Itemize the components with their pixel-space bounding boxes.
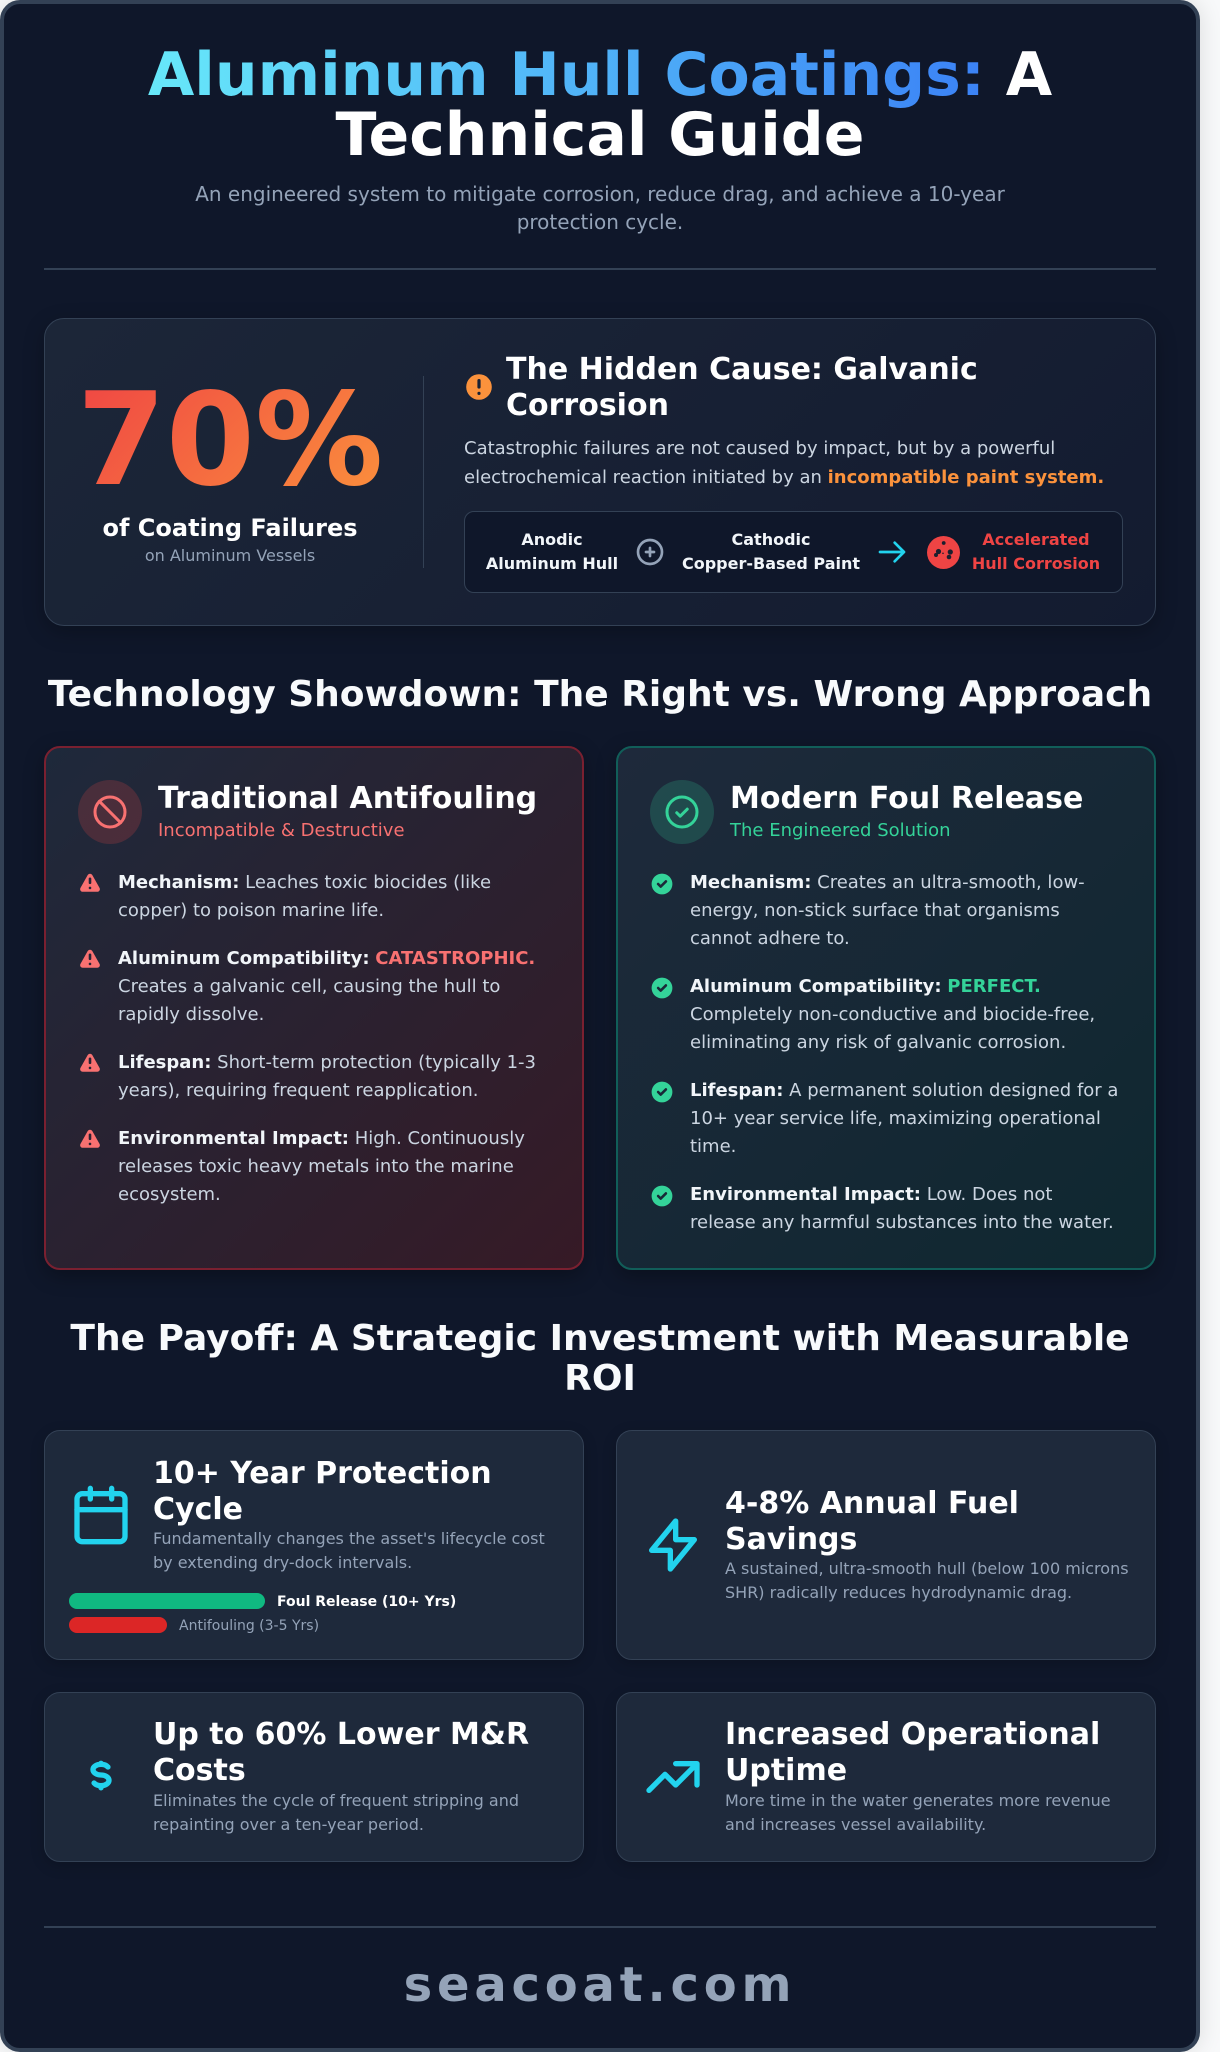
card text: lower costs: Eliminates the cycle of frequent stripping and	[153, 1791, 519, 1810]
card text: protection cycle	[153, 1529, 545, 1572]
heading: the payoff	[70, 1318, 1130, 1399]
stat sublabel: on Aluminum Vessels	[145, 546, 315, 565]
icon: arrow	[878, 541, 906, 563]
panel subtitle: incompatible: Incompatible & Destructive	[158, 820, 405, 841]
icon: warning 1	[80, 874, 100, 892]
text: foul release lifespan	[690, 1080, 1118, 1157]
panel title: traditional antifouling: Traditional Antifouling	[158, 781, 537, 816]
icon: check 4	[652, 1186, 672, 1206]
text: antifouling environmental impact: Environmental Impact: High. Continuously	[118, 1128, 525, 1149]
title	[148, 40, 1052, 170]
panel: traditional antifouling	[44, 746, 584, 1270]
text: antifouling lifespan: years), requiring frequent reapplication.	[118, 1080, 478, 1101]
text: foul release mechanism: energy, non-stick surface that organisms	[690, 900, 1060, 921]
flow: cathodic paint: Cathodic	[732, 530, 810, 549]
text: foul release lifespan: 10+ year service life, maximizing operational	[690, 1108, 1101, 1129]
icon: warning 4	[80, 1130, 100, 1148]
text: foul release environmental impact	[690, 1184, 1114, 1233]
icon: corrosion	[927, 536, 960, 569]
panel: hidden cause hero	[44, 318, 1156, 626]
icon: check 3	[652, 1082, 672, 1102]
flow: anodic hull: Aluminum Hull	[486, 554, 618, 573]
card text: lower costs: repainting over a ten-year period.	[153, 1815, 424, 1834]
text: antifouling compatibility: Creates a galvanic cell, causing the hull to	[118, 976, 500, 997]
title: Technical Guide	[336, 100, 864, 170]
text: foul release mechanism	[690, 872, 1085, 949]
card text: uptime: More time in the water generates more revenue	[725, 1791, 1111, 1810]
text: foul release environmental impact: Environmental Impact: Low. Does not	[690, 1184, 1052, 1205]
text: antifouling mechanism: Mechanism: Leaches toxic biocides (like	[118, 872, 491, 893]
card text: fuel savings: A sustained, ultra-smooth hull (below 100 microns	[725, 1559, 1129, 1578]
heading: hidden cause	[506, 352, 978, 423]
card title: protection cycle	[153, 1456, 492, 1527]
card title: uptime: Increased Operational	[725, 1717, 1100, 1752]
card text: protection cycle: Fundamentally changes the asset's lifecycle cost	[153, 1529, 545, 1548]
icon: dollar	[90, 1760, 112, 1790]
text: foul release compatibility	[690, 976, 1095, 1053]
text: antifouling compatibility: rapidly dissolve.	[118, 1004, 264, 1025]
text: hidden cause description: Catastrophic failures are not caused by impact, but by a powerful	[464, 438, 1055, 459]
panel: galvanic reaction flow	[464, 511, 1123, 593]
icon: calendar	[74, 1486, 128, 1544]
bar: antifouling	[69, 1617, 167, 1633]
icon: plus	[636, 538, 664, 566]
card text: fuel savings	[725, 1559, 1129, 1602]
text: foul release environmental impact: release any harmful substances into the water.	[690, 1212, 1114, 1233]
card text: protection cycle: by extending dry-dock intervals.	[153, 1553, 412, 1572]
icon: ban	[78, 780, 142, 844]
text: foul release compatibility: Completely non-conductive and biocide-free,	[690, 1004, 1095, 1025]
text: foul release compatibility: Aluminum Compatibility: PERFECT.	[690, 976, 1041, 997]
text: antifouling environmental impact: ecosystem.	[118, 1184, 221, 1205]
heading: the payoff: The Payoff: A Strategic Investment with Measurable	[70, 1318, 1130, 1359]
flow: accelerated corrosion: Hull Corrosion	[972, 554, 1100, 573]
flow: accelerated corrosion: Accelerated	[982, 530, 1090, 549]
panel: lower costs card	[44, 1692, 584, 1862]
subtitle	[195, 182, 1005, 234]
text: antifouling lifespan	[118, 1052, 536, 1101]
text: hidden cause description: electrochemical reaction initiated by an incompatible paint system.	[464, 467, 1104, 488]
card title: fuel savings	[725, 1486, 1019, 1557]
icon: trending up	[641, 1745, 705, 1809]
flow: cathodic paint	[682, 530, 860, 573]
heading: hidden cause: Corrosion	[506, 388, 669, 423]
text: foul release lifespan: time.	[690, 1136, 736, 1157]
flow: cathodic paint: Copper-Based Paint	[682, 554, 860, 573]
panel: fuel savings card	[616, 1430, 1156, 1660]
card title: uptime: Uptime	[725, 1753, 847, 1788]
text: antifouling compatibility	[118, 948, 535, 1025]
text: antifouling compatibility: Aluminum Compatibility: CATASTROPHIC.	[118, 948, 535, 969]
card title: uptime	[725, 1717, 1100, 1789]
card title: fuel savings: Savings	[725, 1522, 857, 1557]
card title: lower costs	[153, 1717, 529, 1788]
text: antifouling mechanism	[118, 872, 491, 921]
bar label: foul release: Foul Release (10+ Yrs)	[277, 1594, 456, 1610]
panel: uptime card	[616, 1692, 1156, 1862]
card text: lower costs	[153, 1791, 519, 1834]
bar label: antifouling: Antifouling (3-5 Yrs)	[179, 1618, 319, 1634]
text: foul release lifespan: Lifespan: A permanent solution designed for a	[690, 1080, 1118, 1101]
icon: warning 3	[80, 1054, 100, 1072]
text: antifouling environmental impact	[118, 1128, 525, 1205]
text: foul release mechanism: cannot adhere to.	[690, 928, 850, 949]
text: antifouling environmental impact: releases toxic heavy metals into the marine	[118, 1156, 514, 1177]
card title: fuel savings: 4-8% Annual Fuel	[725, 1486, 1019, 1521]
card title: lower costs: Up to 60% Lower M&R	[153, 1717, 529, 1752]
text: hidden cause description	[464, 438, 1104, 488]
panel subtitle: engineered solution: The Engineered Solution	[730, 820, 951, 841]
stat label: of Coating Failures	[102, 514, 358, 542]
card text: uptime: and increases vessel availability.	[725, 1815, 986, 1834]
text: foul release compatibility: eliminating any risk of galvanic corrosion.	[690, 1032, 1066, 1053]
title: Aluminum Hull Coatings: A	[148, 40, 1052, 110]
text: antifouling mechanism: copper) to poison marine life.	[118, 900, 384, 921]
icon: check badge	[650, 780, 714, 844]
flow: accelerated corrosion	[972, 530, 1100, 573]
card text: uptime	[725, 1789, 1111, 1837]
icon: check 2	[652, 978, 672, 998]
panel: modern foul release	[616, 746, 1156, 1270]
panel title: modern foul release: Modern Foul Release	[730, 781, 1083, 816]
icon: lightning	[649, 1518, 697, 1572]
icon: warning 2	[80, 950, 100, 968]
card text: fuel savings: SHR) radically reduces hydrodynamic drag.	[725, 1583, 1072, 1602]
text: foul release mechanism: Mechanism: Creates an ultra-smooth, low-	[690, 872, 1085, 893]
heading: the payoff: ROI	[564, 1358, 636, 1399]
icon: exclamation	[466, 374, 492, 400]
card title: lower costs: Costs	[153, 1753, 246, 1788]
heading: technology showdown: Technology Showdown: The Right vs. Wrong Approach	[48, 674, 1152, 715]
subtitle: protection cycle.	[517, 210, 683, 234]
card title: protection cycle: 10+ Year Protection	[153, 1456, 492, 1491]
heading: hidden cause: The Hidden Cause: Galvanic	[506, 352, 978, 387]
flow: anodic hull	[486, 530, 618, 573]
flow: anodic hull: Anodic	[521, 530, 583, 549]
footer: website: seacoat.com	[404, 1957, 796, 2013]
subtitle: An engineered system to mitigate corrosion, reduce drag, and achieve a 10-year	[195, 182, 1005, 206]
text: antifouling lifespan: Lifespan: Short-term protection (typically 1-3	[118, 1052, 536, 1073]
icon: check 1	[652, 874, 672, 894]
big stat: 70%: 70%	[77, 366, 383, 515]
card title: protection cycle: Cycle	[153, 1492, 243, 1527]
panel: protection cycle card	[44, 1430, 584, 1660]
bar: foul release	[69, 1593, 265, 1609]
